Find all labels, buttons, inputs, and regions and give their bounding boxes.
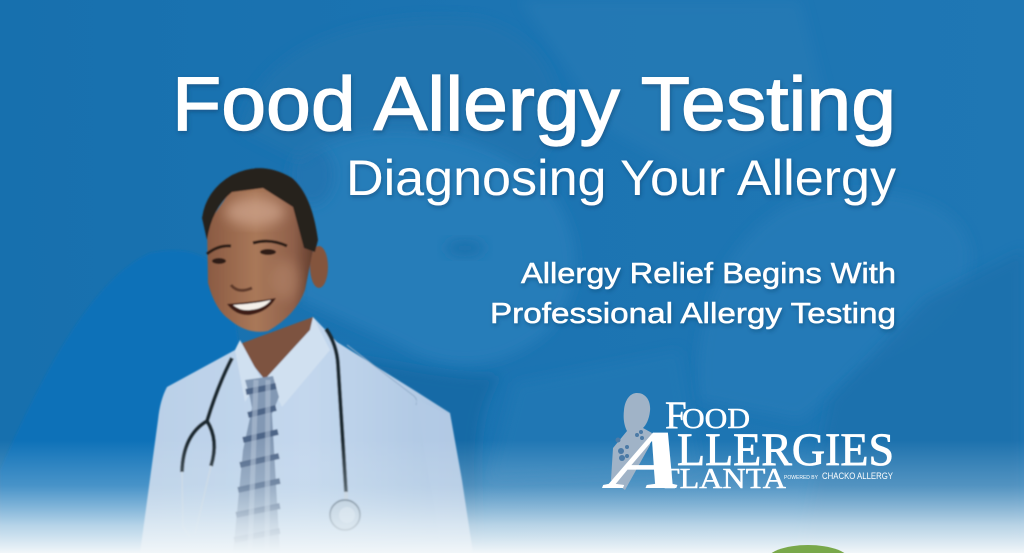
stethoscope <box>182 358 232 472</box>
logo: OOD <box>682 403 750 435</box>
eyebrows <box>207 241 287 254</box>
mouth <box>227 298 276 315</box>
doctor <box>140 168 473 553</box>
tagline: Professional Allergy Testing <box>490 298 896 330</box>
logo <box>594 393 894 506</box>
ghost: book <box>490 350 700 480</box>
ghost: child's head <box>300 122 575 364</box>
ghost: child's eye <box>445 239 485 257</box>
collar <box>235 317 330 407</box>
title: Food Allergy Testing <box>172 62 896 147</box>
tagline <box>490 258 896 330</box>
logo: LLERGIES <box>677 424 894 476</box>
hair <box>202 168 318 252</box>
ghost: child's ear <box>290 145 334 205</box>
ghost: sleeve right <box>800 250 1024 553</box>
icon: allergy dots <box>616 430 644 461</box>
logo text: A <box>594 413 706 506</box>
ghost: blue shoulder <box>0 250 240 553</box>
logo: TLANTA <box>660 463 786 495</box>
logo: CHACKO ALLERGY <box>822 471 893 481</box>
face <box>207 187 315 332</box>
logo: F <box>665 394 687 437</box>
shirt <box>140 317 473 553</box>
subtitle: Diagnosing Your Allergy <box>346 150 896 206</box>
ghost: adult figure top <box>520 0 830 180</box>
ghost: hand <box>698 192 970 420</box>
bottom fade <box>0 440 1024 553</box>
tie <box>233 376 280 553</box>
logo: POWERED BY <box>784 475 818 481</box>
tagline: Allergy Relief Begins With <box>521 258 896 290</box>
eyes <box>212 258 226 264</box>
green apple top <box>766 545 850 553</box>
neck <box>237 317 318 380</box>
nose <box>231 285 252 290</box>
ear <box>310 246 328 288</box>
ghost: hair <box>240 18 557 170</box>
icon: child silhouette <box>611 393 652 490</box>
